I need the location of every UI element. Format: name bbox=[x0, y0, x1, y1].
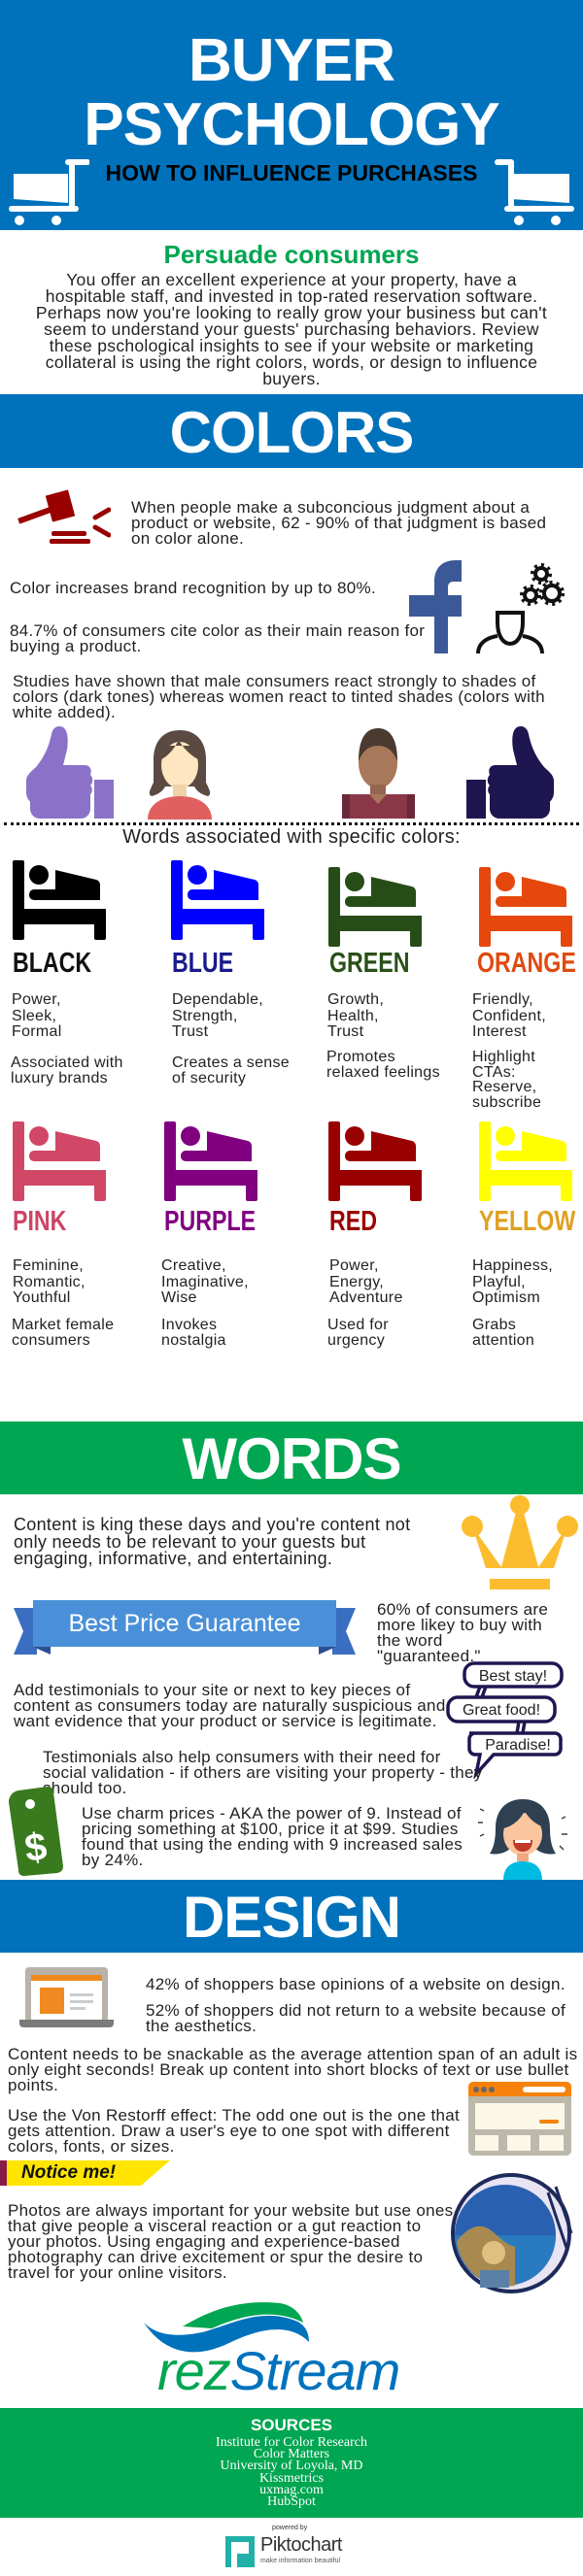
text: yellow use: Grabs bbox=[472, 1317, 516, 1333]
text: pink words: Youthful bbox=[13, 1289, 71, 1306]
text: purple words: Creative, bbox=[161, 1257, 226, 1274]
text: social validation: Testimonials also help consumers with their need for bbox=[43, 1748, 441, 1766]
text: von restorff: colors, fonts, or sizes. bbox=[8, 2137, 175, 2156]
text: green use bbox=[326, 1049, 440, 1081]
intro text: hospitable staff, and invested in top-rated reservation software. bbox=[46, 286, 537, 306]
text: red words: Power, bbox=[329, 1257, 379, 1274]
section: design header bbox=[0, 1880, 583, 1953]
text: subconscious judgment bbox=[131, 498, 546, 548]
text: snackable content: Content needs to be snackable as the average attention span of an adult is bbox=[8, 2045, 577, 2063]
section: sources: Institute for Color Research bbox=[216, 2435, 367, 2450]
text: photos bbox=[8, 2203, 453, 2281]
ribbon: best price guarantee bbox=[14, 1600, 356, 1655]
icon: man bbox=[342, 728, 415, 819]
text: gender study: white added). bbox=[13, 703, 116, 721]
label: ORANGE: ORANGE bbox=[477, 948, 576, 979]
text: green words: Trust bbox=[327, 1023, 363, 1040]
text: 52%: the aesthetics. bbox=[146, 2017, 257, 2035]
text: blue words: Trust bbox=[172, 1023, 208, 1040]
text: black use bbox=[11, 1054, 123, 1087]
icon: woman bbox=[148, 730, 212, 820]
section: sources: HubSpot bbox=[267, 2494, 316, 2509]
intro text: Perhaps now you're looking to really grow your business but can't bbox=[36, 303, 547, 322]
icon: speech bubbles bbox=[445, 1660, 567, 1779]
text: 84.7%: 84.7% of consumers cite color as their main reason for bbox=[10, 621, 425, 640]
text: orange use: Highlight bbox=[472, 1049, 535, 1065]
text: snackable content: only eight seconds! Break up content into short blocks of text or use bullet bbox=[8, 2060, 569, 2079]
label: PURPLE: PURPLE bbox=[164, 1206, 256, 1237]
text: photos: your photos. Using engaging and experience-based bbox=[8, 2232, 400, 2251]
text: brand recognition: Color increases brand recognition by up to 80%. bbox=[10, 579, 376, 597]
text: gender study bbox=[13, 672, 545, 721]
icon: purple thumb bbox=[26, 726, 114, 819]
bed: purple bbox=[164, 1121, 257, 1201]
footer: piktochart: make information beautiful bbox=[260, 2558, 340, 2564]
bed: red bbox=[328, 1121, 422, 1201]
text: red use bbox=[327, 1317, 389, 1349]
text: 60% guaranteed: "guaranteed." bbox=[377, 1647, 481, 1665]
logo: rezStream: rezStream bbox=[157, 2340, 399, 2401]
text: charm prices: by 24%. bbox=[82, 1851, 144, 1869]
intro text: buyers. bbox=[262, 369, 321, 388]
text: red use: urgency bbox=[327, 1332, 385, 1349]
text: purple words bbox=[161, 1257, 249, 1306]
intro text: You offer an excellent experience at your property, have a bbox=[66, 270, 517, 289]
text: green words bbox=[327, 991, 384, 1040]
text: pink words: Feminine, bbox=[13, 1257, 84, 1274]
ribbon: best price guarantee: Best Price Guarantee bbox=[68, 1610, 301, 1637]
icon: crown bbox=[461, 1495, 579, 1589]
logo: rezStream bbox=[144, 2299, 441, 2402]
colors grid bbox=[11, 860, 576, 1349]
text: 60% guaranteed: the word bbox=[377, 1631, 443, 1650]
text: purple use: Invokes bbox=[161, 1317, 217, 1333]
text: 60% guaranteed: 60% of consumers are bbox=[377, 1600, 548, 1619]
text: blue use: Creates a sense bbox=[172, 1054, 290, 1071]
icon: speech bubbles: Best stay! bbox=[479, 1668, 547, 1685]
section: colors header: COLORS bbox=[170, 400, 413, 465]
text: blue use bbox=[172, 1054, 290, 1087]
text: subconscious judgment: product or website, 62 - 90% of that judgment is based bbox=[131, 514, 546, 532]
text: pink words bbox=[13, 1257, 86, 1306]
text: content is king bbox=[14, 1515, 410, 1568]
text: photos: Photos are always important for your website but use ones bbox=[8, 2201, 453, 2220]
label: GREEN: GREEN bbox=[329, 948, 410, 979]
text: content is king: only needs to be relevant to your guests but bbox=[14, 1532, 365, 1552]
icon: speech bubbles: Paradise! bbox=[485, 1737, 551, 1754]
text: blue words bbox=[172, 991, 263, 1040]
icon: navy thumb bbox=[466, 726, 554, 819]
banner: notice me: Notice me! bbox=[21, 2162, 116, 2183]
section: colors header bbox=[0, 394, 583, 468]
text: yellow words: Playful, bbox=[472, 1274, 526, 1289]
label: BLACK: BLACK bbox=[13, 948, 91, 979]
text: charm prices bbox=[82, 1806, 463, 1868]
icon: gavel bbox=[17, 489, 111, 544]
text: yellow words bbox=[472, 1257, 553, 1306]
text: black words: Sleek, bbox=[12, 1008, 56, 1023]
intro text: seem to understand your guests' purchasing behaviors. Review bbox=[44, 319, 539, 339]
text: green use: relaxed feelings bbox=[326, 1064, 440, 1081]
text: testimonials: content as consumers today are naturally suspicious and bbox=[14, 1696, 446, 1715]
title bbox=[84, 27, 499, 158]
text: photos: photography can drive excitement or spur the desire to bbox=[8, 2248, 423, 2266]
icon: dollar tag: $ bbox=[22, 1825, 50, 1870]
text: yellow use: attention bbox=[472, 1332, 534, 1349]
section: sources: Kissmetrics bbox=[259, 2471, 324, 2486]
text: orange words: Confident, bbox=[472, 1008, 546, 1023]
intro text: these pschological insights to see if your website or marketing bbox=[50, 336, 533, 355]
icon: person with gears bbox=[476, 563, 565, 653]
section: sources: University of Loyola, MD bbox=[220, 2459, 362, 2473]
text: von restorff: Use the Von Restorff effect: The odd one out is the one that bbox=[8, 2106, 460, 2124]
text: 84.7%: buying a product. bbox=[10, 637, 142, 655]
text: photos: that give people a visceral reaction or a gut reaction to bbox=[8, 2217, 421, 2235]
section: words header: WORDS bbox=[183, 1426, 400, 1491]
title: BUYER bbox=[189, 27, 394, 94]
text: red words: Energy, bbox=[329, 1274, 384, 1289]
text: pink use bbox=[12, 1317, 114, 1349]
text: red use: Used for bbox=[327, 1317, 389, 1333]
icon: happy woman bbox=[476, 1799, 569, 1881]
section: sources: Color Matters bbox=[254, 2447, 329, 2461]
text: social validation: social validation - if others are visiting your property - they bbox=[43, 1763, 483, 1782]
text: content is king: Content is king these days and you're content not bbox=[14, 1515, 410, 1534]
text: purple words: Wise bbox=[161, 1289, 197, 1306]
text: black use: Associated with bbox=[11, 1054, 123, 1071]
label: YELLOW: YELLOW bbox=[479, 1206, 575, 1237]
text: 42%: 42% of shoppers base opinions of a website on design. bbox=[146, 1975, 566, 1993]
text: yellow words: Happiness, bbox=[472, 1257, 553, 1274]
text: purple use: nostalgia bbox=[161, 1332, 226, 1349]
label: PINK: PINK bbox=[13, 1206, 66, 1237]
text: social validation bbox=[43, 1750, 483, 1796]
text: red words bbox=[329, 1257, 403, 1306]
text: social validation: should too. bbox=[43, 1779, 126, 1797]
section: sources: SOURCES bbox=[251, 2416, 332, 2434]
text: subconscious judgment: on color alone. bbox=[131, 529, 244, 548]
text: subconscious judgment: When people make a subconcious judgment about a bbox=[131, 498, 530, 517]
text: photos: travel for your online visitors. bbox=[8, 2263, 227, 2282]
text: blue words: Strength, bbox=[172, 1008, 238, 1023]
icon: photo lens bbox=[447, 2173, 575, 2293]
section: sources: uxmag.com bbox=[259, 2483, 324, 2497]
bed: black bbox=[13, 860, 106, 940]
banner: notice me bbox=[0, 2160, 170, 2186]
text: orange use bbox=[472, 1049, 541, 1111]
section: words header bbox=[0, 1422, 583, 1494]
bed: yellow bbox=[479, 1121, 572, 1201]
text: orange words bbox=[472, 991, 546, 1040]
icon: browser window bbox=[468, 2082, 571, 2156]
text: von restorff bbox=[8, 2108, 460, 2155]
section: sources bbox=[0, 2408, 583, 2518]
text: content is king: engaging, informative, and entertaining. bbox=[14, 1549, 332, 1568]
text: purple words: Imaginative, bbox=[161, 1274, 249, 1289]
text: green words: Health, bbox=[327, 1008, 379, 1023]
intro text bbox=[36, 270, 547, 388]
intro text: collateral is using the right colors, words, or design to influence bbox=[46, 352, 537, 372]
footer: piktochart: powered by bbox=[272, 2525, 307, 2531]
text: red words: Adventure bbox=[329, 1289, 403, 1306]
text: snackable content bbox=[8, 2047, 577, 2093]
icon: speech bubbles: Great food! bbox=[463, 1702, 540, 1719]
text: 52% bbox=[146, 2003, 566, 2034]
footer: piktochart: Piktochart bbox=[260, 2534, 342, 2556]
text: 52%: 52% of shoppers did not return to a website because of bbox=[146, 2001, 566, 2020]
text: pink use: consumers bbox=[12, 1332, 90, 1349]
text: gender study: Studies have shown that male consumers react strongly to shades of bbox=[13, 672, 536, 690]
subheading: words associated: Words associated with specific colors: bbox=[122, 826, 461, 848]
text: snackable content: points. bbox=[8, 2076, 58, 2094]
bed: orange bbox=[479, 867, 572, 947]
subtitle: HOW TO INFLUENCE PURCHASES bbox=[106, 160, 477, 185]
text: 60% guaranteed: more likey to buy with bbox=[377, 1616, 542, 1634]
text: gender study: colors (dark tones) whereas women react to tinted shades (colors with bbox=[13, 687, 545, 706]
text: black words bbox=[12, 991, 62, 1040]
text: green words: Growth, bbox=[327, 991, 384, 1008]
text: yellow words: Optimism bbox=[472, 1289, 540, 1306]
intro heading: Persuade consumers bbox=[163, 240, 420, 269]
text: pink words: Romantic, bbox=[13, 1274, 86, 1289]
text: 84.7% bbox=[10, 621, 425, 655]
text: orange words: Friendly, bbox=[472, 991, 533, 1008]
text: blue use: of security bbox=[172, 1070, 246, 1087]
text: charm prices: found that using the ending with 9 increased sales bbox=[82, 1835, 463, 1854]
bed: green bbox=[328, 867, 422, 947]
icon: cart right bbox=[495, 159, 574, 225]
label: RED: RED bbox=[329, 1206, 377, 1237]
text: yellow use bbox=[472, 1317, 534, 1349]
text: 60% guaranteed bbox=[377, 1602, 548, 1664]
title: PSYCHOLOGY bbox=[84, 91, 499, 158]
text: orange words: Interest bbox=[472, 1023, 527, 1040]
footer: piktochart bbox=[225, 2525, 358, 2569]
text: pink use: Market female bbox=[12, 1317, 114, 1333]
icon: dollar tag bbox=[5, 1785, 65, 1876]
dotted divider bbox=[4, 822, 579, 825]
text: von restorff: gets attention. Draw a user's eye to one spot with different bbox=[8, 2122, 450, 2140]
text: orange use: Reserve, bbox=[472, 1079, 536, 1095]
bed: blue bbox=[171, 860, 264, 940]
text: black words: Power, bbox=[12, 991, 61, 1008]
label: BLUE: BLUE bbox=[172, 948, 233, 979]
text: testimonials bbox=[14, 1683, 446, 1729]
text: orange use: CTAs: bbox=[472, 1064, 516, 1080]
text: charm prices: Use charm prices - AKA the power of 9. Instead of bbox=[82, 1804, 462, 1823]
header band bbox=[0, 0, 583, 230]
text: black words: Formal bbox=[12, 1023, 62, 1040]
text: testimonials: Add testimonials to your site or next to key pieces of bbox=[14, 1681, 410, 1699]
text: green use: Promotes bbox=[326, 1049, 395, 1065]
icon: cart left bbox=[9, 159, 89, 225]
text: purple use bbox=[161, 1317, 226, 1349]
text: blue words: Dependable, bbox=[172, 991, 263, 1008]
section: design header: DESIGN bbox=[183, 1885, 400, 1950]
text: black use: luxury brands bbox=[11, 1070, 108, 1087]
bed: pink bbox=[13, 1121, 106, 1201]
icon: facebook bbox=[409, 560, 462, 653]
text: charm prices: pricing something at $100, price it at $99. Studies bbox=[82, 1820, 459, 1838]
icon: laptop bbox=[19, 1967, 114, 2027]
text: testimonials: want evidence that your product or service is legitimate. bbox=[14, 1712, 437, 1730]
text: orange use: subscribe bbox=[472, 1093, 541, 1111]
